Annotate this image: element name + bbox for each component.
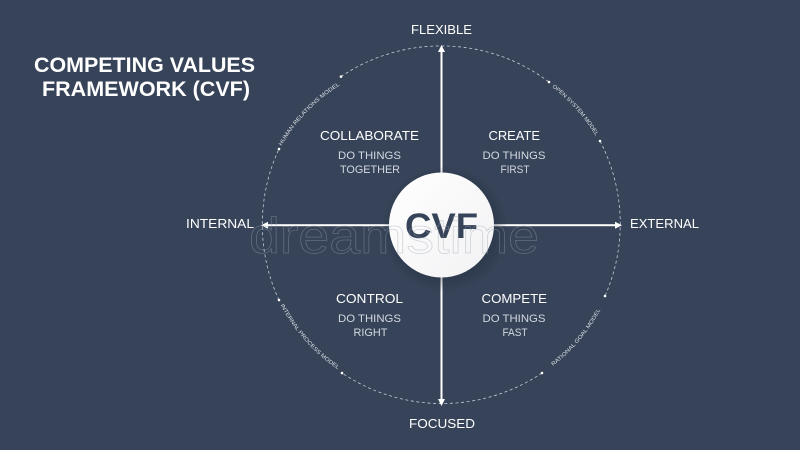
quadrant: compete: FAST (502, 327, 528, 339)
ring label: rational goal model: RATIONAL GOAL MODEL (551, 310, 600, 366)
center disc shadow (382, 166, 508, 292)
quadrant: control: CONTROL (336, 291, 403, 306)
center disc: CVF (405, 207, 478, 246)
title (34, 54, 255, 101)
dashed outer ring (262, 46, 620, 404)
quadrant: control: RIGHT (354, 327, 388, 339)
quadrant: control: DO THINGS (338, 313, 401, 325)
quadrant: control (336, 291, 403, 339)
quadrant: collaborate: TOGETHER (340, 164, 400, 176)
ring label: internal process model: INTERNAL PROCESS MODEL (280, 304, 338, 370)
quadrant: create (482, 128, 546, 176)
quadrant: compete (482, 291, 547, 339)
ring marker dots (278, 75, 606, 374)
quadrant: compete: DO THINGS (482, 313, 546, 325)
title: COMPETING VALUES (34, 54, 255, 77)
quadrant: create: FIRST (500, 164, 530, 176)
axis label: focused: FOCUSED (409, 416, 475, 431)
ring label: human relations model: HUMAN RELATIONS MODEL (278, 83, 340, 146)
ring label: open system model: OPEN SYSTEM MODEL (552, 84, 598, 136)
arrow: vertical axis (438, 45, 445, 406)
arrow: horizontal axis (261, 222, 622, 229)
watermark: dreamstime (249, 208, 539, 264)
axis label: external: EXTERNAL (630, 216, 699, 231)
axis label: flexible: FLEXIBLE (411, 22, 472, 37)
quadrant: create: DO THINGS (482, 150, 546, 162)
title: FRAMEWORK (CVF) (42, 78, 250, 101)
quadrant: compete: COMPETE (482, 291, 547, 306)
center disc (389, 172, 494, 278)
quadrant: collaborate (320, 128, 419, 176)
axis label: internal: INTERNAL (186, 216, 254, 231)
quadrant: collaborate: COLLABORATE (320, 128, 419, 143)
quadrant: collaborate: DO THINGS (338, 150, 401, 162)
quadrant: create: CREATE (488, 128, 540, 143)
